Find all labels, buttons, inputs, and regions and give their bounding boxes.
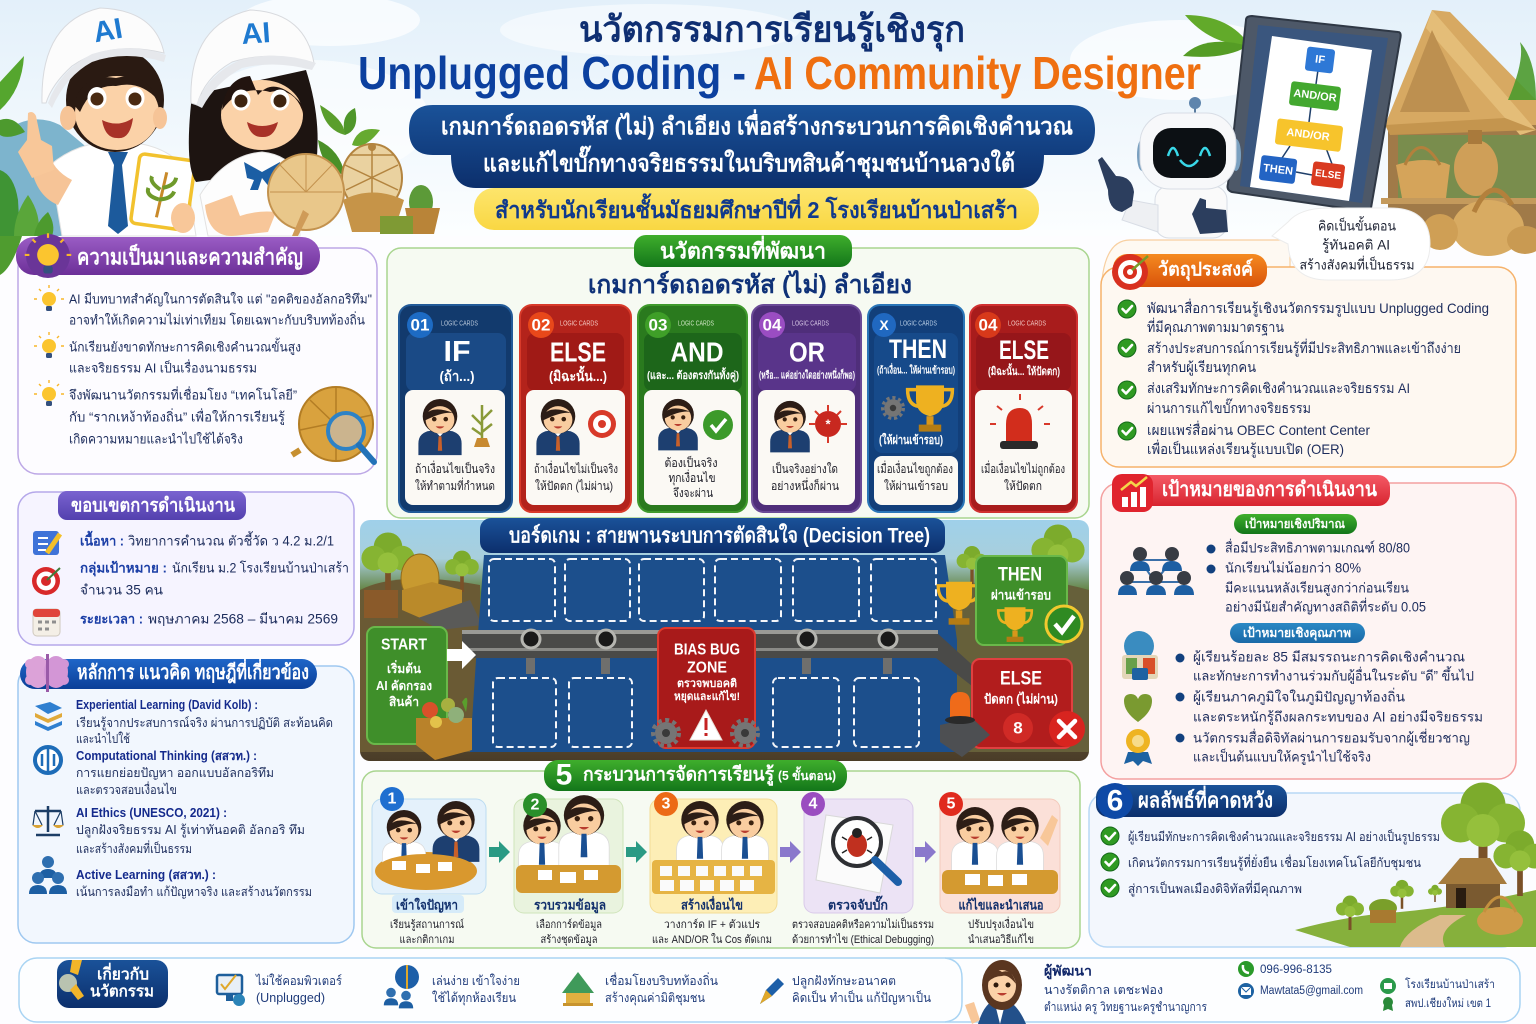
text block: quantitative goals: สื่อมีประสิทธิภาพตามเกณฑ์ 80/80 bbox=[1225, 538, 1410, 556]
card: ELSE 04: ให้ปัดตก bbox=[1004, 479, 1042, 493]
step 3: และ AND/OR ใน Cos ตัดเกม bbox=[652, 933, 772, 946]
heading: innovation: นวัตกรรมที่พัฒนา bbox=[660, 234, 826, 264]
text: duration: ระยะเวลา : bbox=[80, 612, 143, 626]
audience banner: สำหรับนักเรียนชั้นมัธยมศึกษาปีที่ 2 โรงเรียนบ้านป่าเสร้า bbox=[495, 193, 1018, 223]
arrow: 4 to 5 bbox=[915, 841, 936, 863]
card: IF bbox=[399, 305, 512, 512]
text: future skills: ปลูกฝังทักษะอนาคต bbox=[792, 974, 896, 989]
text: local context: เชื่อมโยงบริบทท้องถิ่น bbox=[605, 972, 718, 988]
heading: background bbox=[16, 237, 320, 275]
panel: innovation cards bbox=[387, 234, 1089, 518]
heading: targets: เป้าหมายของการดำเนินงาน bbox=[1162, 478, 1377, 501]
text block: background bullets: เกิดความหมายและนำไปใช้ได้จริง bbox=[69, 432, 243, 446]
header background bbox=[0, 0, 1536, 236]
flowchart: AND/OR yellow: AND/OR bbox=[1286, 126, 1330, 144]
board title bbox=[480, 518, 945, 553]
subtitle banner: เกมการ์ดถอดรหัส (ไม่) ลำเอียง เพื่อสร้างกระบวนการคิดเชิงคำนวณ bbox=[441, 108, 1073, 140]
button: about the innovation bbox=[57, 960, 168, 1008]
BIAS BUG ZONE card: ตรวจพบอคติ bbox=[677, 677, 737, 690]
panel: 5-step process bbox=[362, 758, 1080, 948]
text: phone: 096-996-8135 bbox=[1260, 964, 1332, 976]
illustration: siren on box bbox=[940, 692, 990, 757]
title bbox=[358, 8, 1201, 99]
illustration: boy student in AI helmet: AI bbox=[91, 13, 125, 49]
text block: objectives list: ส่งเสริมทักษะการคิดเชิงคำนวณและจริยธรรม AI bbox=[1147, 380, 1410, 396]
text: email: Mawtata5@gmail.com bbox=[1260, 985, 1363, 997]
text: target group: จำนวน 35 คน bbox=[80, 582, 163, 598]
text: content: วิทยาการคำนวณ ตัวชี้วัด ว 4.2 ม.2/1 bbox=[128, 530, 334, 548]
bottom dashed slots bbox=[493, 678, 919, 747]
text: developer info: ตำแหน่ง ครู วิทยฐานะครูชำนาญการ bbox=[1044, 1000, 1207, 1015]
step 4 bbox=[792, 792, 934, 946]
text block: active learning: Active Learning (สสวท.) : bbox=[76, 868, 216, 882]
text block: quantitative goals bbox=[1225, 538, 1426, 614]
BIAS BUG ZONE card: ZONE bbox=[687, 660, 727, 676]
icon: school bbox=[1380, 978, 1396, 994]
illustration: robot bbox=[1098, 97, 1241, 238]
illustration: leaf and tablet with flowchart bbox=[1183, 15, 1401, 211]
step 3: 3 bbox=[662, 796, 671, 812]
step 5: 5 bbox=[947, 796, 956, 812]
flowchart: THEN bbox=[1259, 155, 1297, 184]
card: IF: IF bbox=[444, 336, 470, 368]
BIAS BUG ZONE card bbox=[653, 628, 758, 748]
step 2: 2 bbox=[531, 796, 540, 814]
BIAS BUG ZONE card: BIAS BUG bbox=[674, 642, 740, 658]
card: AND: AND bbox=[670, 336, 724, 368]
text: duration: พฤษภาคม 2568 – มีนาคม 2569 bbox=[148, 612, 338, 626]
step 1: เรียนรู้สถานการณ์ bbox=[390, 918, 464, 931]
illustration: developer portrait bbox=[965, 960, 1026, 1024]
step 1: 1 bbox=[388, 790, 397, 808]
step 3: วางการ์ด IF + ตัวแปร bbox=[664, 918, 760, 931]
text block: objectives list: ที่มีคุณภาพตามมาตรฐาน bbox=[1147, 318, 1284, 336]
card: THEN: (ให้ผ่านเข้ารอบ) bbox=[879, 432, 943, 447]
text: easy to play bbox=[432, 974, 520, 1006]
icon: medal bbox=[1124, 729, 1152, 766]
card: AND: 03 bbox=[649, 316, 667, 334]
heading: process: 5 bbox=[556, 758, 572, 792]
card: ELSE 04 bbox=[970, 305, 1077, 512]
text: content: เนื้อหา : bbox=[80, 530, 124, 548]
START card bbox=[367, 627, 447, 744]
icon: ribbon bbox=[59, 960, 84, 1000]
text block: outcomes list: เกิดนวัตกรรมการเรียนรู้ที่ยั่งยืน เชื่อมโยงเทคโนโลยีกับชุมชน bbox=[1128, 854, 1421, 871]
text block: quantitative goals: อย่างมีนัยสำคัญทางสถิติที่ระดับ 0.05 bbox=[1225, 598, 1426, 614]
text block: computational thinking: การแยกย่อยปัญหา ออกแบบอัลกอริทึม bbox=[76, 766, 274, 780]
card: THEN: X bbox=[879, 317, 889, 333]
text block: computational thinking bbox=[76, 749, 274, 797]
icon: heart bbox=[1124, 694, 1152, 722]
text block: outcomes list: ผู้เรียนมีทักษะการคิดเชิงคำนวณและจริยธรรม AI อย่างเป็นรูปธรรม bbox=[1128, 829, 1440, 845]
text: future skills bbox=[792, 974, 931, 1005]
text: unplugged: ไม่ใช้คอมพิวเตอร์ bbox=[255, 974, 342, 988]
card: ELSE 02: 02 bbox=[532, 316, 550, 334]
THEN outcome card: THEN bbox=[998, 564, 1042, 586]
icon: woven wheel and magnifier bbox=[292, 387, 374, 462]
START card: สินค้า bbox=[389, 695, 419, 709]
subtitle banner bbox=[409, 105, 1095, 188]
icon: check badge bbox=[1046, 606, 1082, 642]
text: future skills: คิดเป็น ทำเป็น แก้ปัญหาเป็น bbox=[792, 990, 931, 1005]
icon: mail bbox=[1238, 983, 1254, 999]
text block: qualitative goals: ผู้เรียนร้อยละ 85 มีสมรรถนะการคิดเชิงคำนวณ bbox=[1193, 650, 1465, 666]
card: OR: LOGIC CARDS bbox=[792, 320, 829, 328]
icon: monitor bbox=[217, 975, 245, 1006]
BIAS BUG ZONE card: หยุดและแก้ไข! bbox=[674, 689, 740, 704]
card: THEN: THEN bbox=[889, 334, 947, 364]
card: THEN: (ถ้าเงื่อน... ให้ผ่านเข้ารอบ) bbox=[877, 362, 955, 376]
text block: objectives list: เพื่อเป็นแหล่งเรียนรู้แบบเปิด (OER) bbox=[1147, 440, 1344, 458]
step 5 bbox=[939, 792, 1060, 946]
text: target group: กลุ่มเป้าหมาย : bbox=[80, 560, 167, 576]
illustration: boy student in AI helmet bbox=[18, 8, 196, 236]
icon: number 6: 6 bbox=[1107, 784, 1123, 818]
START card: เริ่มต้น bbox=[387, 660, 421, 676]
icon: phone bbox=[1238, 961, 1254, 977]
illustration: board scenery trees bbox=[361, 524, 1085, 598]
icon: X badge bbox=[1049, 711, 1085, 747]
card: ELSE 04: เมื่อเงื่อนไขไม่ถูกต้อง bbox=[981, 460, 1065, 477]
text: developer info: นางรัตติกาล เตชะฟอง bbox=[1044, 983, 1163, 997]
text block: active learning: เน้นการลงมือทำ แก้ปัญหาจริง และสร้างนวัตกรรม bbox=[76, 885, 312, 899]
card: IF: 01 bbox=[411, 316, 429, 334]
START card: START bbox=[381, 636, 427, 654]
icon: trophy on stand bbox=[938, 582, 980, 625]
illustration: blue game mat bbox=[470, 555, 957, 752]
heading: process: กระบวนการจัดการเรียนรู้ bbox=[583, 764, 775, 786]
text block: qualitative goals: และทักษะการทำงานร่วมกับผู้อื่นในระดับ “ดี” ขึ้นไป bbox=[1193, 666, 1474, 684]
card: OR: OR bbox=[789, 336, 825, 368]
step 1: เข้าใจปัญหา bbox=[396, 896, 458, 914]
icon: calendar bbox=[33, 609, 60, 636]
text block: qualitative goals: ผู้เรียนภาคภูมิใจในภูมิปัญญาท้องถิ่น bbox=[1193, 688, 1405, 706]
card: AND: จึงจะผ่าน bbox=[673, 486, 713, 500]
text block: background bullets: จึงพัฒนานวัตกรรมที่เชื่อมโยง “เทคโนโลยี” bbox=[69, 386, 297, 402]
flowchart: IF bbox=[1305, 46, 1335, 74]
text block: outcomes list: สู่การเป็นพลเมืองดิจิทัลที่มีคุณภาพ bbox=[1128, 880, 1302, 897]
card: IF: (ถ้า...) bbox=[440, 368, 474, 384]
card: IF: LOGIC CARDS bbox=[441, 320, 478, 328]
text block: quantitative goals: นักเรียนไม่น้อยกว่า 80% bbox=[1225, 560, 1361, 576]
illustration: village landscape bbox=[1295, 782, 1536, 947]
speech bubble: คิดเป็นขั้นตอน bbox=[1318, 216, 1396, 234]
heading: background: ความเป็นมาและความสำคัญ bbox=[77, 242, 303, 270]
text block: AI ethics: และสร้างสังคมที่เป็นธรรม bbox=[76, 840, 192, 856]
icon: big bulb bbox=[25, 233, 71, 278]
text block: objectives list: สำหรับผู้เรียนทุกคน bbox=[1147, 359, 1256, 376]
card: OR bbox=[752, 305, 861, 512]
card: ELSE 02: (มิฉะนั้น...) bbox=[549, 365, 607, 384]
footer bar bbox=[19, 958, 1520, 1024]
text: target group: นักเรียน ม.2 โรงเรียนบ้านป่าเสร้า bbox=[172, 560, 349, 576]
ELSE outcome card: ELSE bbox=[1000, 668, 1042, 690]
flowchart: IF: IF bbox=[1314, 53, 1326, 67]
text: school: โรงเรียนบ้านป่าเสร้า bbox=[1405, 977, 1495, 991]
icon: books bbox=[35, 702, 62, 731]
step 4: ด้วยการทำไข (Ethical Debugging) bbox=[792, 933, 934, 946]
text: local context bbox=[605, 972, 718, 1006]
audience banner bbox=[474, 188, 1039, 230]
text: easy to play: เล่นง่าย เข้าใจง่าย bbox=[432, 974, 520, 988]
text block: background bullets: นักเรียนยังขาดทักษะการคิดเชิงคำนวณขั้นสูง bbox=[69, 338, 301, 356]
heading: process: (5 ขั้นตอน) bbox=[778, 766, 836, 783]
heading: scope bbox=[58, 491, 246, 520]
arrow: 1 to 2 bbox=[489, 841, 510, 863]
speech bubble: สร้างสังคมที่เป็นธรรม bbox=[1300, 256, 1414, 272]
illustration: local crafts bbox=[268, 105, 440, 236]
text block: experiential learning bbox=[76, 698, 333, 746]
card: ELSE 02: ถ้าเงื่อนไขไม่เป็นจริง bbox=[534, 460, 618, 476]
icon: alert gear: 8 bbox=[1013, 718, 1023, 738]
text block: computational thinking: Computational Thinking (สสวท.) : bbox=[76, 749, 257, 763]
heading: targets bbox=[1112, 475, 1390, 506]
illustration: girl student in AI helmet bbox=[189, 10, 318, 236]
card: IF: ถ้าเงื่อนไขเป็นจริง bbox=[415, 460, 495, 476]
heading: objectives: วัตถุประสงค์ bbox=[1158, 258, 1253, 282]
button: about the innovation: นวัตกรรม bbox=[90, 982, 154, 1000]
speech bubble bbox=[1272, 208, 1430, 280]
text block: AI ethics: AI Ethics (UNESCO, 2021) : bbox=[76, 806, 227, 820]
step 4: ตรวจสอบอคติหรือความไม่เป็นธรรม bbox=[792, 917, 934, 931]
illustration: girl student in AI helmet: AI bbox=[240, 17, 272, 51]
card: OR: (หรือ... แค่อย่างใดอย่างหนึ่งก็พอ) bbox=[759, 368, 855, 382]
icon: brain bbox=[25, 654, 69, 692]
card: ELSE 02: ELSE bbox=[550, 336, 606, 368]
ELSE outcome card: ปัดตก (ไม่ผ่าน) bbox=[984, 690, 1058, 706]
icon: target bbox=[32, 567, 60, 595]
icon: growth chart bbox=[1112, 474, 1153, 512]
icon: globe and people bbox=[384, 965, 419, 1008]
title: AI Community Designer bbox=[754, 47, 1201, 99]
text block: qualitative goals bbox=[1193, 650, 1483, 766]
card: ELSE 04: LOGIC CARDS bbox=[1008, 320, 1046, 328]
step 4: 4 bbox=[809, 796, 818, 812]
panel: scope bbox=[18, 491, 354, 645]
text block: outcomes list bbox=[1128, 829, 1440, 897]
card: THEN bbox=[868, 305, 964, 512]
card: IF: ให้ทำตามที่กำหนด bbox=[415, 477, 495, 493]
text block: experiential learning: เรียนรู้จากประสบการณ์จริง ผ่านการปฏิบัติ สะท้อนคิด bbox=[76, 716, 333, 731]
board title: บอร์ดเกม : สายพานระบบการตัดสินใจ (Decision Tree) bbox=[509, 522, 930, 548]
card: THEN: LOGIC CARDS bbox=[900, 320, 937, 328]
pill: quantitative bbox=[1234, 514, 1357, 534]
icon: people bbox=[29, 856, 67, 894]
subtitle banner: และแก้ไขบั๊กทางจริยธรรมในบริบทสินค้าชุมชนบ้านลวงใต้ bbox=[483, 144, 1015, 180]
text block: objectives list: พัฒนาสื่อการเรียนรู้เชิงนวัตกรรมรูปแบบ Unplugged Coding bbox=[1147, 299, 1489, 317]
text block: qualitative goals: นวัตกรรมสื่อดิจิทัลผ่านการยอมรับจากผู้เชี่ยวชาญ bbox=[1193, 728, 1470, 746]
text: district: สพป.เชียงใหม่ เขต 1 bbox=[1405, 997, 1491, 1010]
text: developer info bbox=[1044, 964, 1207, 1015]
card: OR: เป็นจริงอย่างใด bbox=[772, 461, 838, 476]
step 1 bbox=[372, 787, 486, 946]
text block: objectives list bbox=[1147, 299, 1489, 458]
icon: objectives target bbox=[1112, 254, 1148, 290]
text: target group bbox=[80, 560, 349, 598]
text block: background bullets: กับ “รากเหง้าท้องถิ่น” เพื่อให้การเรียนรู้ bbox=[69, 408, 285, 426]
flowchart: AND/OR yellow bbox=[1275, 118, 1343, 152]
top dashed slots bbox=[489, 559, 936, 621]
step 3: สร้างเงื่อนไข bbox=[681, 896, 743, 912]
icon: content bbox=[33, 531, 60, 555]
arrow: start bbox=[447, 641, 476, 669]
heading: outcomes bbox=[1096, 784, 1287, 817]
text block: qualitative goals: และตระหนักรู้ถึงผลกระทบของ AI อย่างมีจริยธรรม bbox=[1193, 710, 1483, 726]
icon: people network bbox=[1118, 547, 1194, 595]
step 3 bbox=[650, 792, 777, 946]
icon: community craft bbox=[1122, 631, 1158, 680]
bullets: qualitative bbox=[1176, 654, 1184, 742]
step 5: แก้ไขและนำเสนอ bbox=[958, 896, 1044, 912]
title: Unplugged Coding - bbox=[358, 47, 746, 99]
step 1: และกติกาเกม bbox=[400, 934, 454, 946]
speech bubble: รู้ทันอคติ AI bbox=[1322, 238, 1390, 254]
icon: number 6 bbox=[1097, 783, 1133, 819]
icon: temple bbox=[562, 972, 594, 1006]
text: unplugged: (Unplugged) bbox=[256, 991, 325, 1005]
panel: objectives bbox=[1101, 240, 1516, 467]
text block: AI ethics: ปลูกฝังจริยธรรม AI รู้เท่าทันอคติ อัลกอริ ทึม bbox=[76, 823, 305, 838]
card: ELSE 04: 04 bbox=[979, 316, 998, 334]
step 2: สร้างชุดข้อมูล bbox=[540, 934, 598, 946]
panel: game board bbox=[360, 518, 1089, 761]
icon: warning bbox=[690, 710, 722, 740]
step 2 bbox=[514, 793, 623, 946]
heading: process bbox=[544, 758, 847, 792]
pill: qualitative bbox=[1230, 623, 1365, 643]
card: ELSE 02: LOGIC CARDS bbox=[560, 320, 598, 328]
heading: scope: ขอบเขตการดำเนินงาน bbox=[71, 496, 235, 516]
flowchart: AND/OR green: AND/OR bbox=[1293, 87, 1337, 105]
text block: quantitative goals: มีคะแนนหลังเรียนสูงกว่าก่อนเรียน bbox=[1225, 580, 1409, 596]
icons: checks bbox=[1118, 300, 1136, 440]
step 5: ปรับปรุงเงื่อนไข bbox=[968, 916, 1034, 931]
pill: qualitative: เป้าหมายเชิงคุณภาพ bbox=[1243, 626, 1351, 641]
text block: objectives list: เผยแพร่สื่อผ่าน OBEC Content Center bbox=[1147, 421, 1370, 438]
text block: background bullets bbox=[69, 292, 372, 446]
icon: pen bbox=[760, 978, 784, 1004]
text: developer info: ผู้พัฒนา bbox=[1044, 964, 1092, 980]
text block: background bullets: AI มีบทบาทสำคัญในการตัดสินใจ แต่ "อคติของอัลกอริทึม" bbox=[69, 292, 372, 306]
step 2: เลือกการ์ดข้อมูล bbox=[536, 918, 602, 931]
arrow: 2 to 3 bbox=[626, 841, 647, 863]
flowchart: ELSE: ELSE bbox=[1314, 168, 1342, 182]
panel: targets bbox=[1101, 474, 1516, 779]
panel: background bbox=[0, 233, 377, 474]
text block: active learning bbox=[76, 868, 312, 899]
text block: objectives list: ผ่านการแก้ไขบั๊กทางจริยธรรม bbox=[1147, 398, 1311, 416]
icon: scales bbox=[32, 806, 64, 835]
flowchart: AND/OR green bbox=[1289, 81, 1341, 111]
text block: objectives list: สร้างประสบการณ์การเรียนรู้ที่มีประสิทธิภาพและเข้าถึงง่าย bbox=[1147, 339, 1461, 357]
START card: AI คัดกรอง bbox=[376, 679, 432, 693]
card: ELSE 02 bbox=[520, 305, 631, 512]
text block: qualitative goals: และเป็นต้นแบบให้ครูนำไปใช้จริง bbox=[1193, 748, 1371, 766]
card: OR: อย่างหนึ่งก็ผ่าน bbox=[771, 477, 839, 493]
icons: outcome checks bbox=[1101, 827, 1119, 897]
icon: bullet bulbs bbox=[34, 285, 64, 406]
subheading: game name: เกมการ์ดถอดรหัส (ไม่) ลำเอียง bbox=[588, 269, 912, 299]
heading: objectives bbox=[1113, 254, 1267, 287]
step 2: รวบรวมข้อมูล bbox=[534, 898, 606, 914]
card: OR: 04 bbox=[763, 316, 782, 334]
icon: district badge bbox=[1383, 997, 1393, 1011]
arrow: 3 to 4 bbox=[780, 841, 801, 863]
button: about the innovation: เกี่ยวกับ bbox=[97, 962, 149, 984]
text: content bbox=[80, 530, 334, 548]
card: AND: ทุกเงื่อนไข bbox=[668, 469, 716, 486]
flowchart: ELSE bbox=[1311, 161, 1345, 189]
text block: computational thinking: และตรวจสอบเงื่อนไข bbox=[76, 781, 177, 797]
ELSE outcome card bbox=[972, 659, 1085, 748]
text: easy to play: ใช้ได้ทุกห้องเรียน bbox=[432, 991, 516, 1006]
text block: AI ethics bbox=[76, 806, 305, 856]
illustration: thatched hut with baskets bbox=[1381, 10, 1536, 256]
illustration: golden cage crate bbox=[364, 554, 482, 630]
card: OR: * bbox=[825, 416, 831, 432]
card: ELSE 04: ELSE bbox=[999, 335, 1049, 365]
card: AND: LOGIC CARDS bbox=[678, 320, 714, 328]
panel: principles bbox=[18, 654, 354, 943]
heading: innovation bbox=[634, 234, 852, 267]
step 5: นำเสนอวิธีแก้ไข bbox=[968, 933, 1034, 946]
text: unplugged bbox=[255, 974, 342, 1005]
conveyor belt bbox=[462, 630, 1000, 700]
title: นวัตกรรมการเรียนรู้เชิงรุก bbox=[579, 8, 965, 52]
text block: experiential learning: และนำไปใช้ bbox=[76, 732, 130, 746]
text block: background bullets: และจริยธรรม AI เป็นเรื่องนามธรรม bbox=[69, 358, 257, 376]
card: ELSE 04: (มิฉะนั้น... ให้ปัดตก) bbox=[988, 363, 1060, 378]
pill: quantitative: เป้าหมายเชิงปริมาณ bbox=[1245, 517, 1345, 531]
card: ELSE 02: ให้ปัดตก (ไม่ผ่าน) bbox=[535, 479, 613, 493]
card: AND: (และ... ต้องตรงกันทั้งคู่) bbox=[647, 367, 739, 383]
panel: outcomes bbox=[1089, 782, 1536, 947]
heading: principles: หลักการ แนวคิด ทฤษฎีที่เกี่ยวข้อง bbox=[77, 657, 309, 684]
THEN outcome card bbox=[976, 556, 1082, 645]
step 4: ตรวจจับบั๊ก bbox=[828, 896, 888, 912]
card: AND: ต้องเป็นจริง bbox=[664, 455, 718, 470]
heading: outcomes: ผลลัพธ์ที่คาดหวัง bbox=[1138, 784, 1273, 812]
flowchart: THEN: THEN bbox=[1262, 162, 1294, 178]
bullets: quantitative bbox=[1206, 544, 1216, 574]
text: local context: สร้างคุณค่ามิติชุมชน bbox=[605, 991, 705, 1006]
THEN outcome card: ผ่านเข้ารอบ bbox=[991, 588, 1051, 602]
text block: background bullets: อาจทำให้เกิดความไม่เท่าเทียม โดยเฉพาะกับบริบทท้องถิ่น bbox=[69, 312, 365, 328]
card: THEN: เมื่อเงื่อนไขถูกต้อง bbox=[877, 460, 953, 477]
card: AND bbox=[638, 305, 747, 512]
illustration: produce crate bbox=[416, 698, 472, 760]
text block: experiential learning: Experiential Learning (David Kolb) : bbox=[76, 698, 258, 712]
heading: principles bbox=[20, 657, 317, 689]
card: THEN: ให้ผ่านเข้ารอบ bbox=[884, 479, 948, 493]
icon: hexagon brain bbox=[35, 747, 61, 773]
